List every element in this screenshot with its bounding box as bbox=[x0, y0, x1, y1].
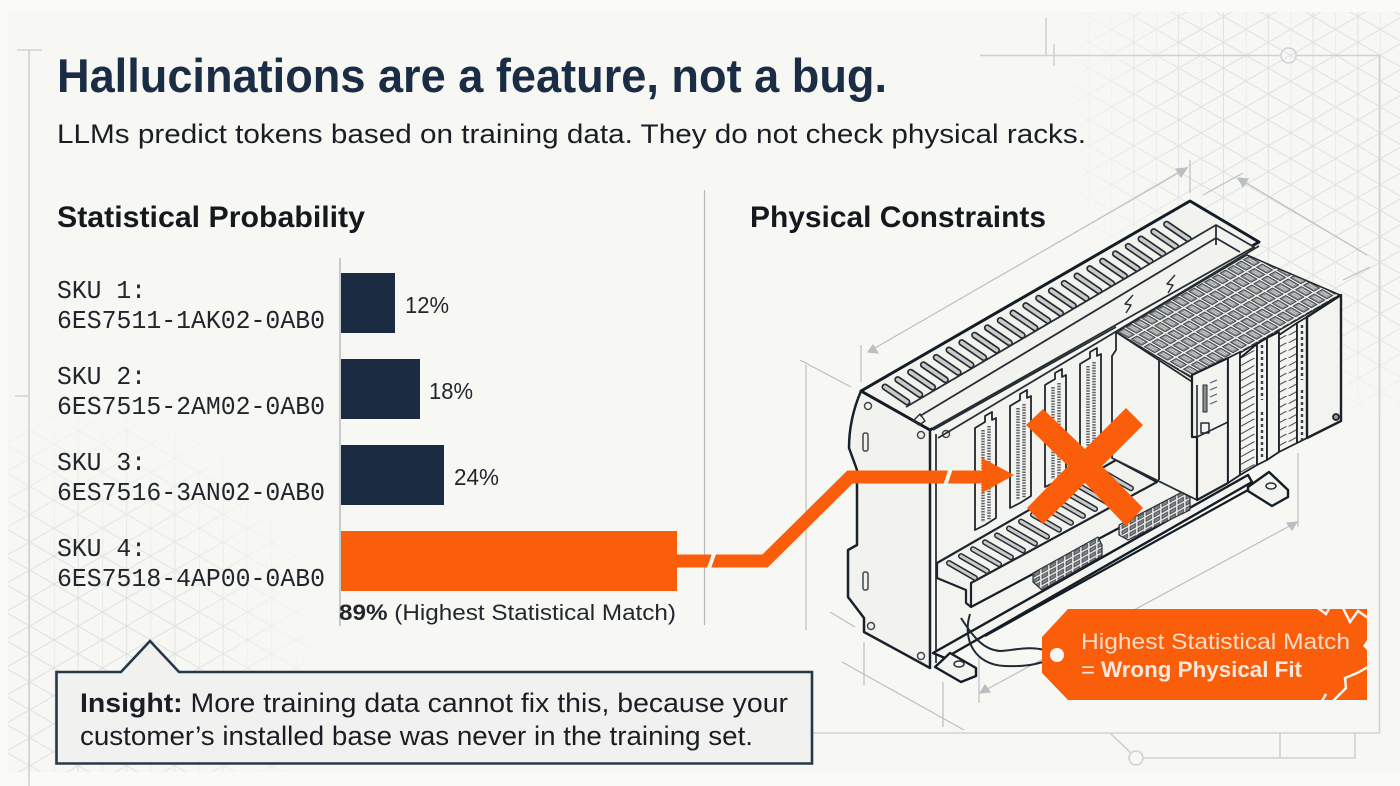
panel divider bbox=[704, 190, 706, 625]
SKU 2 row: 6ES7515-2AM02-0AB0 bbox=[57, 392, 325, 422]
mounting foot: left bbox=[935, 653, 976, 682]
SKU 3 row: 6ES7516-3AN02-0AB0 bbox=[57, 478, 325, 508]
heading: physical constraints: Physical Constraints bbox=[750, 201, 1046, 234]
SKU 4 row: SKU 4: bbox=[57, 534, 146, 564]
top cable duct bbox=[861, 201, 1259, 430]
heading: statistical probability: Statistical Probability bbox=[57, 201, 365, 234]
connector strips bbox=[975, 348, 1101, 530]
icon: orange X bbox=[1026, 408, 1143, 526]
SKU 4 row: 89% (Highest Statistical Match) bbox=[339, 600, 676, 625]
duct slots bbox=[885, 224, 1189, 402]
SKU 1 row bbox=[57, 273, 449, 336]
callout tag: Highest Statistical Match bbox=[1081, 629, 1350, 654]
rack back panel bbox=[936, 332, 1250, 660]
SKU 4 row bbox=[57, 531, 677, 625]
modules top bbox=[1116, 255, 1340, 381]
callout tag: Wrong Physical Fit bbox=[1101, 657, 1302, 682]
SKU 1 row: 6ES7511-1AK02-0AB0 bbox=[57, 306, 325, 336]
insight callout: Insight: More training data cannot fix this, because your bbox=[80, 688, 788, 718]
SKU 3 row: SKU 3: bbox=[57, 448, 146, 478]
arrow: from SKU 4 to rack bbox=[677, 458, 1014, 571]
subtitle: LLMs predict tokens based on training data. They do not check physical racks. bbox=[57, 119, 1086, 149]
terminal blocks bbox=[1033, 490, 1190, 590]
bar chart: SKU probabilities bbox=[57, 258, 677, 626]
insight callout: customer’s installed base was never in the training set. bbox=[80, 721, 753, 751]
dimension lines bbox=[800, 160, 1370, 730]
tag string bbox=[961, 614, 1057, 666]
duct inner channel bbox=[906, 225, 1259, 438]
side panel holes bbox=[863, 402, 950, 660]
lower cable duct bbox=[937, 460, 1157, 607]
SKU 2 row bbox=[57, 359, 473, 422]
mounting foot: right bbox=[1248, 472, 1288, 506]
SKU 3 row: 24% bbox=[454, 464, 499, 490]
CPU module bbox=[1192, 358, 1228, 500]
callout tag bbox=[1042, 608, 1368, 701]
IO modules bbox=[1228, 295, 1341, 483]
title: Hallucinations are a feature, not a bug. bbox=[57, 49, 887, 102]
rack side panel bbox=[848, 391, 930, 668]
illustration: PLC rack bbox=[848, 201, 1341, 682]
SKU 3 row bbox=[57, 445, 499, 508]
blueprint grid: top right bbox=[1094, 12, 1400, 388]
insight callout bbox=[56, 641, 812, 764]
callout tag: = bbox=[1081, 657, 1095, 682]
SKU 1 row: 12% bbox=[405, 292, 449, 318]
lower rail and base bbox=[933, 475, 1252, 658]
SKU 2 row: 18% bbox=[429, 378, 473, 404]
SKU 2 row: SKU 2: bbox=[57, 362, 146, 392]
blank modules bbox=[1112, 332, 1197, 500]
SKU 4 row: 6ES7518-4AP00-0AB0 bbox=[57, 564, 325, 594]
lower duct slots bbox=[949, 473, 1131, 578]
SKU 1 row: SKU 1: bbox=[57, 276, 146, 306]
blueprint grid: bottom left bbox=[8, 444, 285, 772]
